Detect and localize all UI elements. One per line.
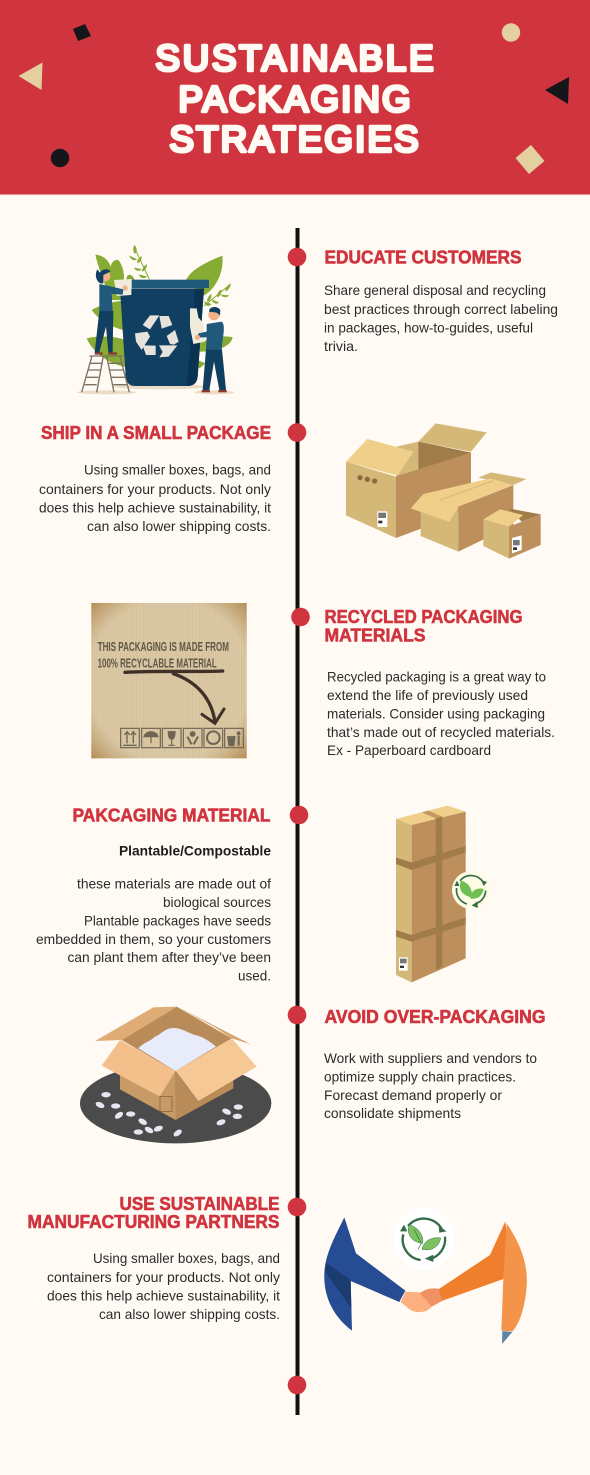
title: SUSTAINABLE [156,38,434,78]
subheading: Plantable/Compostable [119,842,271,858]
heading: PAKCAGING MATERIAL [72,806,270,826]
panel: avoid over-packaging [324,1007,546,1121]
bin [120,288,204,386]
box flaps [95,1007,177,1041]
heading: MANUFACTURING PARTNERS [28,1212,280,1232]
hand-drawn arrow [125,671,224,723]
body text: used. [238,968,271,984]
title: STRATEGIES [170,118,418,160]
body text: can also lower shipping costs. [87,518,271,534]
illustration: three cardboard boxes [346,423,541,559]
title: PACKAGING [178,78,410,120]
title [156,38,434,160]
body text: consolidate shipments [324,1105,461,1121]
body text: Ex - Paperboard cardboard [327,742,491,758]
handling icons [121,728,243,748]
heading: USE SUSTAINABLE [120,1194,280,1214]
header band [0,0,590,194]
body text [39,462,271,534]
heading [28,1194,280,1232]
woman [95,269,128,355]
body text: biological sources [163,894,271,910]
body text: extend the life of previously used [327,687,528,703]
icon: black circle [51,149,69,167]
body text: optimize supply chain practices. [324,1068,516,1084]
illustration: recycling bin with people [77,245,234,394]
eco badge [393,1208,455,1271]
icon: beige diamond [516,145,544,174]
body text: these materials are made out of [77,876,271,892]
white bottle [190,308,205,344]
body text: Recycled packaging is a great way to [327,668,546,684]
foam filling [138,1028,216,1071]
panel: ship in a small package [39,423,271,534]
heading: MATERIALS [324,626,426,646]
body text [324,1050,537,1121]
panel: recycled packaging materials [324,607,555,758]
sign text [98,640,229,671]
body text: materials. Consider using packaging [327,706,545,722]
leaves [87,245,233,368]
hands [401,1289,443,1312]
heading: RECYCLED PACKAGING [324,607,522,627]
sign text: 100% RECYCLABLE MATERIAL [98,657,217,671]
illustration: recyclable cardboard sign [91,603,247,758]
body text: Using smaller boxes, bags, and [93,1250,280,1266]
body text: Plantable packages have seeds [84,912,271,928]
body text: containers for your products. Not only [47,1269,280,1285]
body text [327,668,555,758]
blue sleeve [324,1217,405,1331]
body text: Work with suppliers and vendors to [324,1050,537,1066]
body text: Share general disposal and recycling [324,282,546,298]
illustration: open box with packing peanuts [80,1007,271,1143]
sign text: THIS PACKAGING IS MADE FROM [98,640,229,654]
recycling symbol [135,315,179,357]
body text: embedded in them, so your customers [36,931,271,947]
icon: beige triangle [18,62,42,90]
heading: AVOID OVER-PACKAGING [324,1007,546,1027]
illustration: handshake with eco badge [324,1208,527,1344]
body text: Using smaller boxes, bags, and [84,462,271,478]
body text [324,282,558,354]
large box [346,423,487,538]
body text: that’s made out of recycled materials. [327,724,555,740]
orange sleeve [438,1221,507,1301]
timeline [288,228,310,1415]
ladder [82,356,129,392]
body text: does this help achieve sustainability, it [39,500,271,516]
icon: black square [73,24,91,41]
body text [36,876,271,984]
heading [324,607,522,646]
icon: beige circle [502,23,520,42]
illustration: tall taped box with eco badge [396,806,490,982]
packing peanuts [95,1092,243,1138]
panel: sustainable manufacturing partners [28,1194,280,1322]
heading: SHIP IN A SMALL PACKAGE [41,423,271,443]
panel: educate customers [324,248,558,354]
body text: containers for your products. Not only [39,481,271,497]
body text: does this help achieve sustainability, it [47,1288,280,1304]
white packet [114,279,132,296]
icon: black triangle [545,77,569,104]
medium box [411,472,527,552]
body text [47,1250,280,1322]
body text: best practices through correct labeling [324,301,558,317]
body text: in packages, how-to-guides, useful [324,320,533,336]
panel: packaging material [36,806,271,984]
man [195,307,227,392]
body text: Forecast demand properly or [324,1087,502,1103]
heading: EDUCATE CUSTOMERS [324,248,522,268]
body text: can plant them after they’ve been [68,949,271,965]
small box [483,508,541,559]
body text: can also lower shipping costs. [99,1306,280,1322]
body text: trivia. [324,338,358,354]
eco badge [452,871,490,909]
